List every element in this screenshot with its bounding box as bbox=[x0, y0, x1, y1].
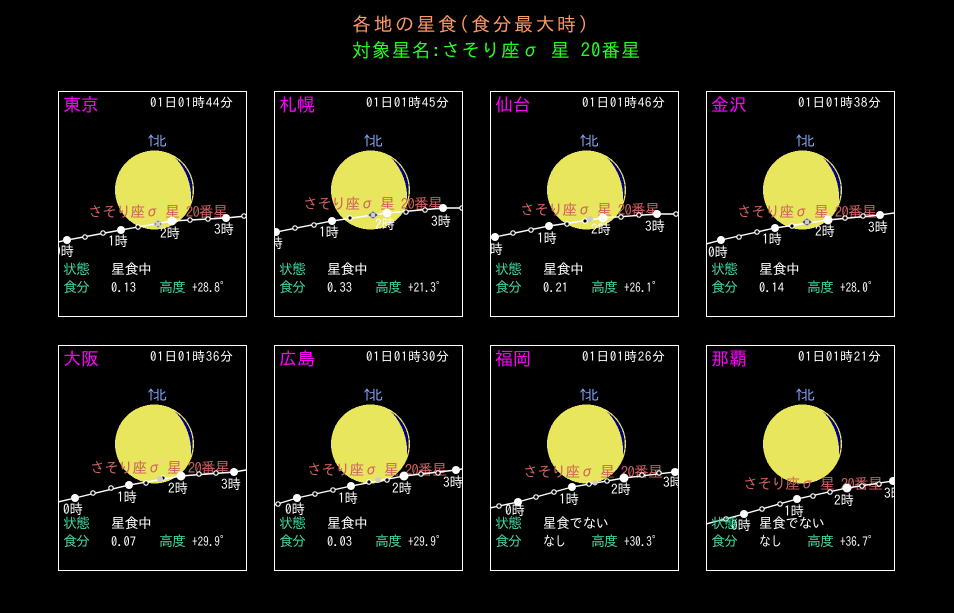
star track: 2時 bbox=[815, 224, 835, 238]
status: 星食中 bbox=[327, 516, 368, 530]
status: 状態 bbox=[63, 261, 90, 276]
star track: 3時 bbox=[431, 214, 451, 228]
moon bbox=[763, 150, 842, 230]
north arrow: ↑ bbox=[360, 388, 374, 402]
status: +26.1° bbox=[624, 281, 663, 294]
status: 星食でない bbox=[543, 516, 609, 530]
status: 状態 bbox=[279, 515, 306, 530]
moon bbox=[547, 150, 626, 230]
star track bbox=[54, 214, 246, 258]
status: +30.3° bbox=[624, 535, 663, 548]
star track: 0時 bbox=[263, 236, 283, 250]
status: 0.07 bbox=[111, 535, 136, 548]
panel: 大阪 bbox=[58, 346, 246, 570]
star track: 2時 bbox=[611, 482, 631, 496]
north arrow: 北 bbox=[153, 134, 167, 148]
city name: 東京 bbox=[63, 95, 99, 114]
city name: 大阪 bbox=[63, 350, 99, 368]
star track: 3時 bbox=[221, 477, 241, 491]
status bbox=[495, 261, 663, 294]
status: +29.9° bbox=[408, 535, 447, 548]
star track: 0時 bbox=[731, 518, 751, 532]
city name: 広島 bbox=[279, 350, 315, 368]
star label: さそり座σ 星 20番星 bbox=[90, 460, 230, 475]
panel: 仙台 bbox=[483, 92, 678, 316]
star track: 2時 bbox=[375, 217, 395, 231]
moon bbox=[547, 404, 626, 484]
star track: 3時 bbox=[663, 475, 683, 489]
status bbox=[279, 261, 447, 294]
north arrow: ↑ bbox=[360, 134, 374, 148]
time: 01日01時36分 bbox=[150, 350, 233, 363]
status: 状態 bbox=[63, 515, 90, 530]
panel: 札幌 bbox=[263, 92, 464, 316]
star track: 2時 bbox=[160, 226, 180, 240]
star track: 0時 bbox=[505, 503, 525, 517]
status: 食分 bbox=[711, 534, 738, 548]
north arrow: 北 bbox=[369, 134, 383, 148]
panel: 広島 bbox=[274, 346, 463, 570]
star track: 0時 bbox=[483, 242, 503, 256]
star track: 1時 bbox=[762, 232, 782, 246]
star track: 2時 bbox=[591, 222, 611, 236]
status: 状態 bbox=[495, 261, 522, 276]
north arrow: ↑ bbox=[576, 388, 590, 402]
star track bbox=[706, 477, 904, 532]
star label: さそり座σ 星 20番星 bbox=[737, 204, 877, 219]
star label: さそり座σ 星 20番星 bbox=[88, 204, 228, 219]
star track: 2時 bbox=[168, 481, 188, 495]
status: +28.0° bbox=[840, 281, 879, 294]
star track: 1時 bbox=[537, 231, 557, 245]
north arrow: 北 bbox=[369, 388, 383, 402]
panel: 金沢 bbox=[706, 92, 894, 316]
city name: 那覇 bbox=[711, 350, 747, 368]
time: 01日01時45分 bbox=[366, 96, 449, 109]
north arrow: 北 bbox=[153, 388, 167, 402]
star track: 2時 bbox=[834, 493, 854, 507]
north arrow: ↑ bbox=[792, 134, 806, 148]
star track bbox=[263, 204, 464, 250]
status: 食分 bbox=[495, 534, 522, 548]
status: 星食中 bbox=[759, 262, 800, 276]
status: 食分 bbox=[63, 280, 90, 294]
star track: 0時 bbox=[708, 245, 728, 259]
status: 高度 bbox=[159, 280, 186, 294]
north arrow: 北 bbox=[801, 388, 815, 402]
time: 01日01時30分 bbox=[366, 350, 449, 363]
status bbox=[711, 261, 879, 294]
status: 食分 bbox=[495, 280, 522, 294]
status bbox=[279, 515, 447, 548]
status: 0.03 bbox=[327, 535, 352, 548]
panel: 東京 bbox=[54, 92, 246, 316]
status: 食分 bbox=[63, 534, 90, 548]
north arrow: ↑ bbox=[144, 134, 158, 148]
status: 星食中 bbox=[543, 262, 584, 276]
star track: 1時 bbox=[319, 225, 339, 239]
star track bbox=[490, 468, 683, 517]
star track: 1時 bbox=[559, 492, 579, 506]
star track: 1時 bbox=[784, 504, 804, 518]
moon bbox=[115, 150, 194, 230]
status: 高度 bbox=[159, 534, 186, 548]
time: 01日01時21分 bbox=[798, 350, 881, 363]
status: 星食でない bbox=[759, 516, 825, 530]
north arrow: ↑ bbox=[792, 388, 806, 402]
star track: 1時 bbox=[338, 491, 358, 505]
status: なし bbox=[759, 534, 782, 548]
status bbox=[63, 515, 231, 548]
status bbox=[711, 515, 879, 548]
status: +36.7° bbox=[840, 535, 879, 548]
star track: 0時 bbox=[285, 502, 305, 516]
panel: 那覇 bbox=[706, 346, 904, 570]
moon bbox=[115, 404, 194, 484]
status: +28.8° bbox=[192, 281, 231, 294]
subtitle: target star name: 対象星名:さそり座σ 星 20番星 bbox=[352, 40, 640, 60]
time: 01日01時46分 bbox=[582, 96, 665, 109]
star label: さそり座σ 星 20番星 bbox=[303, 196, 443, 211]
city name: 札幌 bbox=[279, 95, 315, 114]
star track: 3時 bbox=[443, 475, 463, 489]
star track: 3時 bbox=[884, 486, 904, 500]
status: なし bbox=[543, 534, 566, 548]
status: 高度 bbox=[375, 534, 402, 548]
north arrow: ↑ bbox=[144, 388, 158, 402]
status: 0.21 bbox=[543, 281, 568, 294]
star track: 3時 bbox=[645, 219, 665, 233]
status: 0.14 bbox=[759, 281, 784, 294]
status: 星食中 bbox=[327, 262, 368, 276]
status: 0.33 bbox=[327, 281, 352, 294]
star label: さそり座σ 星 20番星 bbox=[523, 464, 663, 479]
city name: 仙台 bbox=[495, 96, 531, 114]
star track bbox=[274, 466, 463, 516]
star track: 3時 bbox=[214, 222, 234, 236]
status: 食分 bbox=[711, 280, 738, 294]
status: 高度 bbox=[807, 534, 834, 548]
north arrow: 北 bbox=[585, 134, 599, 148]
star label: さそり座σ 星 20番星 bbox=[520, 202, 660, 217]
star track: 1時 bbox=[117, 490, 137, 504]
status: 高度 bbox=[591, 280, 618, 294]
time: 01日01時38分 bbox=[798, 96, 881, 109]
status bbox=[495, 515, 663, 548]
status: 状態 bbox=[711, 261, 738, 276]
city name: 福岡 bbox=[495, 349, 531, 368]
panel: 福岡 bbox=[490, 346, 683, 570]
title: 各地の星食(食分最大時) bbox=[352, 15, 588, 34]
moon bbox=[331, 404, 410, 484]
star track bbox=[483, 210, 678, 256]
moon bbox=[763, 404, 842, 484]
status: +21.3° bbox=[408, 281, 447, 294]
status: 高度 bbox=[591, 534, 618, 548]
status: 食分 bbox=[279, 534, 306, 548]
star track: 2時 bbox=[392, 481, 412, 495]
status: 状態 bbox=[711, 515, 738, 530]
moon bbox=[331, 150, 410, 230]
status: 星食中 bbox=[111, 516, 152, 530]
star track: 1時 bbox=[108, 234, 128, 248]
star track: 0時 bbox=[63, 502, 83, 516]
star track bbox=[706, 211, 894, 259]
star track: 3時 bbox=[868, 220, 888, 234]
status: 高度 bbox=[807, 280, 834, 294]
status: 食分 bbox=[279, 280, 306, 294]
star track bbox=[58, 468, 246, 516]
north arrow: 北 bbox=[801, 134, 815, 148]
star track: 0時 bbox=[54, 244, 74, 258]
north arrow: ↑ bbox=[576, 134, 590, 148]
status: 状態 bbox=[495, 515, 522, 530]
city name: 金沢 bbox=[711, 96, 747, 114]
north arrow: 北 bbox=[585, 388, 599, 402]
status: 星食中 bbox=[111, 262, 152, 276]
star label: さそり座σ 星 20番星 bbox=[743, 476, 883, 491]
time: 01日01時26分 bbox=[582, 350, 665, 363]
status: +29.9° bbox=[192, 535, 231, 548]
time: 01日01時44分 bbox=[150, 96, 233, 109]
star label: さそり座σ 星 20番星 bbox=[307, 462, 447, 477]
status: 状態 bbox=[279, 261, 306, 276]
status: 高度 bbox=[375, 280, 402, 294]
status: 0.13 bbox=[111, 281, 136, 294]
status bbox=[63, 261, 231, 294]
